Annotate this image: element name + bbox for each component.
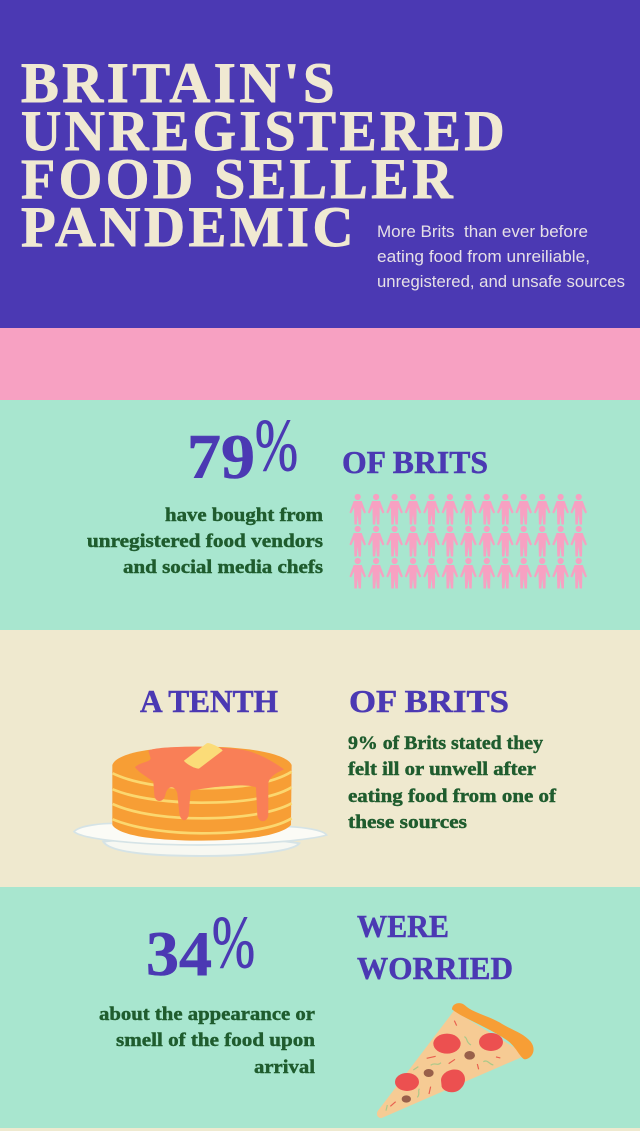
text: vendors: have bought from [165, 505, 323, 526]
stat: 34%: 34 [146, 918, 212, 989]
panel: header [0, 0, 640, 328]
heading: of Brits: OF BRITS [342, 444, 488, 480]
subtitle [377, 222, 625, 291]
title: BRITAIN'S [21, 52, 338, 115]
title: PANDEMIC [21, 196, 357, 259]
subtitle: unregistered, and unsafe sources [377, 272, 625, 291]
text: appearance or smell [99, 1004, 316, 1078]
panel: 79 percent [0, 400, 640, 630]
panel: 34 percent [0, 887, 640, 1128]
panel: a tenth [0, 630, 640, 887]
title [21, 52, 508, 259]
text: appearance or smell: arrival [254, 1057, 315, 1078]
text: felt ill: these sources [348, 812, 467, 833]
stat: 34%: % [212, 902, 255, 984]
subtitle: eating food from unreiliable, [377, 247, 590, 266]
text: vendors [87, 505, 323, 578]
bottom strip [0, 1128, 640, 1131]
heading: were worried [357, 908, 513, 986]
stat: 79% [187, 405, 298, 492]
syrup [135, 747, 284, 821]
text: felt ill: eating food from one of [348, 786, 557, 807]
text: vendors: unregistered food vendors [87, 531, 323, 552]
stat: 34% [146, 902, 255, 989]
heading: were worried: WERE [357, 908, 449, 944]
title: FOOD SELLER [21, 148, 456, 211]
text: felt ill [348, 733, 557, 833]
heading: were worried: WORRIED [357, 950, 513, 986]
subtitle: More Brits than ever before [377, 222, 588, 241]
text: appearance or smell: about the appearance or [99, 1004, 316, 1025]
icon: pancakes [74, 743, 327, 856]
text: felt ill: 9% of Brits stated they [348, 733, 544, 754]
text: felt ill: felt ill or unwell after [348, 759, 537, 780]
text: vendors: and social media chefs [123, 557, 323, 578]
icon: people grid [349, 494, 587, 588]
stat: 79%: % [255, 405, 298, 487]
text: appearance or smell: smell of the food upon [116, 1030, 315, 1051]
title: UNREGISTERED [21, 100, 508, 163]
pink band [0, 328, 640, 400]
heading: a tenth: A TENTH [140, 683, 278, 719]
icon: pizza slice [377, 1003, 534, 1118]
heading: of Brits: OF BRITS [349, 683, 509, 719]
stat: 79%: 79 [187, 421, 255, 492]
